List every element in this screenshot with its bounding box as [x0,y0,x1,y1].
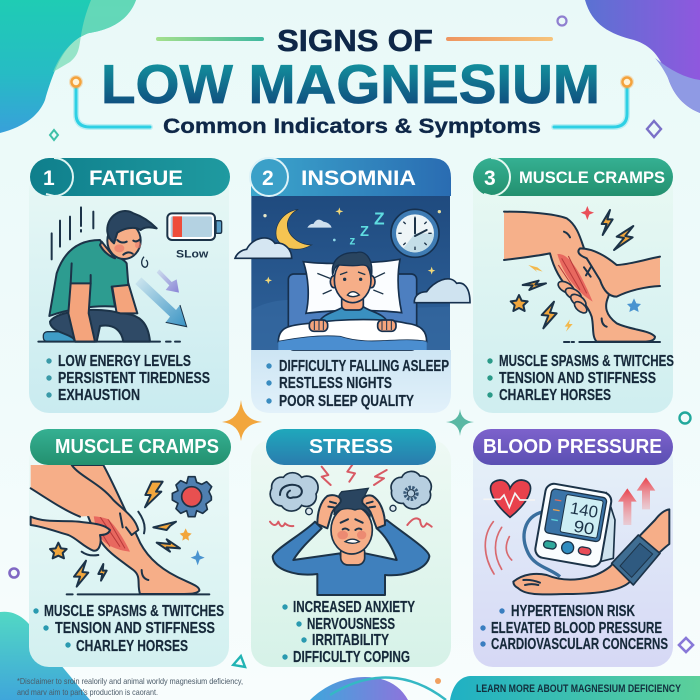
blob: bottom left [0,612,90,700]
list: blood pressure: HYPERTENSION RISK [511,603,636,620]
list: muscle cramps 3 [487,353,674,404]
header: fatigue: 1 [43,167,55,190]
title: low magnesium: LOW MAGNESIUM [101,53,600,115]
title block [69,23,634,138]
illustration: blood pressure monitor [483,477,669,594]
blob: top left [0,0,136,133]
list: insomnia: POOR SLEEP QUALITY [279,393,415,410]
header: stress: STRESS [309,436,393,458]
panel: muscle cramps 3 [473,158,674,413]
title rule right [446,37,553,41]
header: insomnia: INSOMNIA [301,167,416,190]
illustration: stressed man [270,463,432,595]
list: muscle cramps 3: CHARLEY HORSES [499,387,611,404]
blob: top right [585,0,700,113]
illustration: leg cramp [31,465,212,594]
list: muscle cramps 4: CHARLEY HORSES [76,638,188,655]
header: insomnia: 2 [262,167,274,190]
bracket right [554,75,634,127]
footer banner [450,676,700,700]
blob: bottom center [310,677,446,700]
list: insomnia: DIFFICULTY FALLING ASLEEP [279,358,449,375]
illustration: sleepless man: z [349,233,355,247]
card body [473,440,673,667]
panel: insomnia [235,158,470,413]
list: muscle cramps 4: MUSCLE SPASMS & TWITCHES [44,603,224,620]
illustration: tired man [38,207,222,342]
illustration: sleepless man [235,193,470,350]
card body [29,170,229,413]
illustration: sleepless man: Z [374,209,385,229]
list: stress: DIFFICULTY COPING [293,649,410,666]
header: muscle cramps 3 [473,158,673,196]
header: fatigue [30,158,230,196]
list: fatigue [46,353,210,404]
bracket left [69,75,150,127]
disclaimer: and marv aim to part's production is caorant. [17,687,158,697]
panel: stress [251,429,451,667]
list: stress: NERVOUSNESS [307,616,395,633]
card body [29,440,229,667]
header: blood pressure: BLOOD PRESSURE [483,436,662,458]
list: blood pressure [480,603,668,653]
disclaimer [17,676,243,697]
header: stress [266,429,436,465]
title rule left [156,37,264,41]
list: fatigue: LOW ENERGY LEVELS [58,353,191,370]
panel: blood pressure [473,429,673,667]
header: muscle cramps 3: 3 [484,167,496,190]
illustration: blood pressure monitor: 140 [569,498,600,522]
header: muscle cramps 4: MUSCLE CRAMPS [55,436,219,458]
text panel [251,350,451,413]
disclaimer: *Disclaimer to sroin realorily and animal worldy magnesium deficiency, [17,676,243,686]
header: insomnia [250,158,451,196]
illustration: blood pressure monitor: 90 [572,517,596,539]
list: stress: IRRITABILITY [312,632,390,649]
panel: muscle cramps 4 [29,429,231,667]
card body [251,440,451,667]
header: blood pressure [473,429,673,465]
list: insomnia: RESTLESS NIGHTS [279,375,392,392]
list: stress: INCREASED ANXIETY [293,599,415,616]
list: muscle cramps 3: TENSION AND STIFFNESS [499,370,656,387]
header: muscle cramps 4 [30,429,231,465]
panel: fatigue [29,158,230,413]
header: fatigue: FATIGUE [89,167,183,190]
illustration: tired man: SLow [176,248,209,260]
header: muscle cramps 3: MUSCLE CRAMPS [519,168,665,187]
list: fatigue: PERSISTENT TIREDNESS [58,370,210,387]
title: signs of: SIGNS OF [277,23,433,58]
subtitle: Common Indicators & Symptoms [163,114,541,138]
illustration: sleepless man: Z [360,224,369,240]
illustration: calf cramp [504,206,660,342]
list: insomnia [266,358,449,410]
list: fatigue: EXHAUSTION [58,387,140,404]
list: muscle cramps 4 [33,603,224,655]
list: muscle cramps 4: TENSION AND STIFFNESS [55,620,215,637]
card body [473,170,673,413]
list: stress [282,599,415,666]
